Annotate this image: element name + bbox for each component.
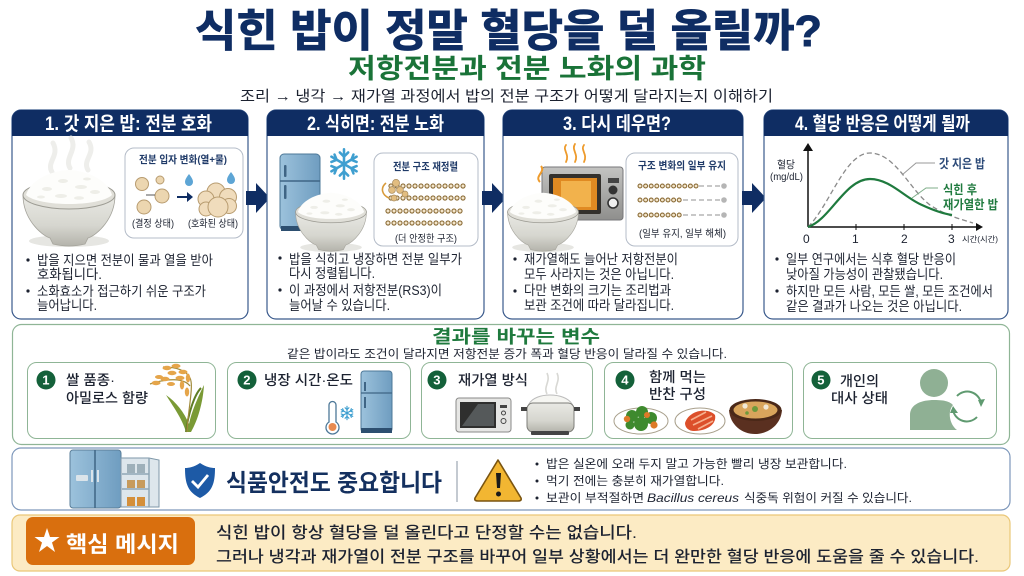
line chart: glucose response over time: 혈당 [777,158,795,171]
line chart: glucose response over time: (mg/dL) [770,172,803,183]
badge: key message [26,517,195,565]
card: side dishes [604,362,792,438]
card: side dishes: 반찬 구성 [649,386,706,402]
text block: safety list: Bacillus cereus [647,491,739,505]
icon: warning triangle [475,460,521,501]
line chart: glucose response over time [770,143,998,246]
heading: variables: 결과를 바꾸는 변수 [432,327,600,347]
text block: panel 4: 낮아질 가능성이 관찰됐습니다. [786,267,943,282]
subtitle: 저항전분과 전분 노화의 과학 [348,54,706,84]
card: fridge time and temp [228,362,410,438]
icon: vegetable plate [614,406,668,434]
icon: fridge and cold rice [280,149,366,252]
icon: open fridge [70,450,159,508]
text block: panel 1: 소화효소가 접근하기 쉬운 구조가 [37,284,206,299]
card: metabolic state [804,362,996,438]
text block: panel 2: 이 과정에서 저항전분(RS3)이 [289,283,442,298]
icon: fridge and thermometer [326,371,392,434]
text block: panel 1 [26,253,214,313]
icon: rice plant [150,364,204,432]
diagram: partial retention: (일부 유지, 일부 해체) [639,227,726,240]
card: metabolic state: 개인의 [840,373,879,389]
variables intro: 같은 밥이라도 조건이 달라지면 저항전분 증가 폭과 혈당 반응이 달라질 수 있습니다. [287,347,727,361]
diagram: starch granule change: (호화된 상태) [188,218,238,230]
heading: food safety: 식품안전도 중요합니다 [226,470,442,497]
text block: panel 3 [513,252,678,313]
text block: panel 4: 일부 연구에서는 식후 혈당 반응이 [786,252,956,267]
diagram: starch realignment: 전분 구조 재정렬 [393,160,458,173]
icon: microwave and rice [508,144,623,252]
panel: variables [12,324,1010,444]
arrow: 3 to 4 [742,183,766,213]
diagram: starch granule change: (결정 상태) [132,218,174,230]
text block: key message: 그러나 냉각과 재가열이 전분 구조를 바꾸어 일부 상황에서는 더 완만한 혈당 반응에 도움을 줄 수 있습니다. [216,548,979,566]
text block: panel 2 [278,252,462,313]
text block: safety list: 먹기 전에는 충분히 재가열합니다. [546,474,724,488]
card: reheat method: 3 [433,372,441,388]
curve: cooled and reheated rice [808,179,952,227]
panel: 4 glucose response [764,110,1008,319]
card: metabolic state: 5 [817,372,825,388]
heading: panel 2: 2. 식히면: 전분 노화 [307,113,444,135]
line chart: glucose response over time: 식힌 후 [943,182,977,197]
line chart: glucose response over time: 1 [852,232,859,246]
line chart: glucose response over time: 0 [803,232,810,246]
card: fridge time and temp: 2 [243,372,251,388]
line chart: glucose response over time: 갓 지은 밥 [939,157,985,171]
panel: key message [12,515,1010,571]
text block: panel 4 [775,252,993,314]
icon: steaming rice bowl [23,138,115,247]
text block: safety list: 밥은 실온에 오래 두지 말고 가능한 빨리 냉장 보관합니다. [546,457,847,471]
diagram: starch granule change: 전분 입자 변화(열+물) [139,153,227,166]
text block: panel 3: 모두 사라지는 것은 아닙니다. [524,267,674,282]
icon: soup bowl [729,399,782,434]
panel: food safety [12,448,1010,510]
card: fridge time and temp: 냉장 시간·온도 [264,372,353,388]
text block: panel 1: 호화됩니다. [37,267,102,282]
text block: panel 3: 다만 변화의 크기는 조리법과 [524,283,671,298]
card: rice variety [28,362,216,438]
icon: rice cooker [521,373,580,435]
text block: panel 1: 늘어납니다. [37,298,97,313]
text block: key message: 식힌 밥이 항상 혈당을 덜 올린다고 단정할 수는 없습니다. [216,524,637,542]
card: rice variety: 1 [42,372,50,388]
card: reheat method: 재가열 방식 [458,372,528,388]
intro line: 조리 → 냉각 → 재가열 과정에서 밥의 전분 구조가 어떻게 달라지는지 이해하기 [240,88,773,105]
curve: freshly cooked rice [808,153,973,227]
text block: panel 2: 늘어날 수 있습니다. [289,298,390,313]
badge: key message: 핵심 메시지 [66,532,179,557]
card: reheat method [422,362,592,438]
text block: safety list [536,457,912,505]
card: metabolic state: 대사 상태 [831,390,888,406]
line chart: glucose response over time: 시간(시간) [962,234,998,244]
line chart: glucose response over time: 2 [901,232,908,246]
arrow: 1 to 2 [246,183,270,213]
diagram: partial retention: 구조 변화의 일부 유지 [638,159,726,172]
text block: panel 2: 밥을 식히고 냉장하면 전분 일부가 [289,252,462,267]
card: side dishes: 함께 먹는 [649,369,706,385]
text block: key message [216,524,979,566]
line chart: glucose response over time: 3 [948,232,955,246]
text block: safety list: 식중독 위험이 커질 수 있습니다. [744,491,912,505]
diagram: starch realignment [374,153,478,246]
text block: panel 4: 하지만 모든 사람, 모든 쌀, 모든 조건에서 [786,284,993,299]
diagram: partial retention [626,153,738,246]
heading: panel 3: 3. 다시 데우면? [563,113,671,135]
card: rice variety: 아밀로스 함량 [66,390,148,406]
text block: panel 2: 다시 정렬됩니다. [289,266,375,281]
heading: panel 1: 1. 갓 지은 밥: 전분 호화 [45,113,212,135]
icon: microwave [456,398,511,432]
icon: person with cycle [910,369,985,430]
panel: 1 freshly cooked rice [12,110,248,319]
icon: shield check [185,463,215,498]
text block: panel 3: 재가열해도 늘어난 저항전분이 [524,252,678,267]
title: 식힌 밥이 정말 혈당을 덜 올릴까? [195,7,822,56]
card: rice variety: 쌀 품종· [66,372,115,388]
text block: panel 1: 밥을 지으면 전분이 물과 열을 받아 [37,253,214,268]
text block: safety list: 보관이 부적절하면 [546,491,644,505]
diagram: starch granule change [125,148,243,238]
diagram: starch realignment: (더 안정한 구조) [395,233,457,245]
arrow: 2 to 3 [482,183,506,213]
text block: panel 4: 같은 결과가 나오는 것은 아닙니다. [786,299,962,314]
text block: panel 3: 보관 조건에 따라 달라집니다. [524,298,674,313]
line chart: glucose response over time: 재가열한 밥 [943,197,998,212]
heading: panel 4: 4. 혈당 반응은 어떻게 될까 [795,113,970,135]
panel: 2 cooling [267,110,484,319]
card: side dishes: 4 [621,372,629,388]
panel: 3 reheating [503,110,743,319]
icon: kimchi plate [675,408,725,434]
